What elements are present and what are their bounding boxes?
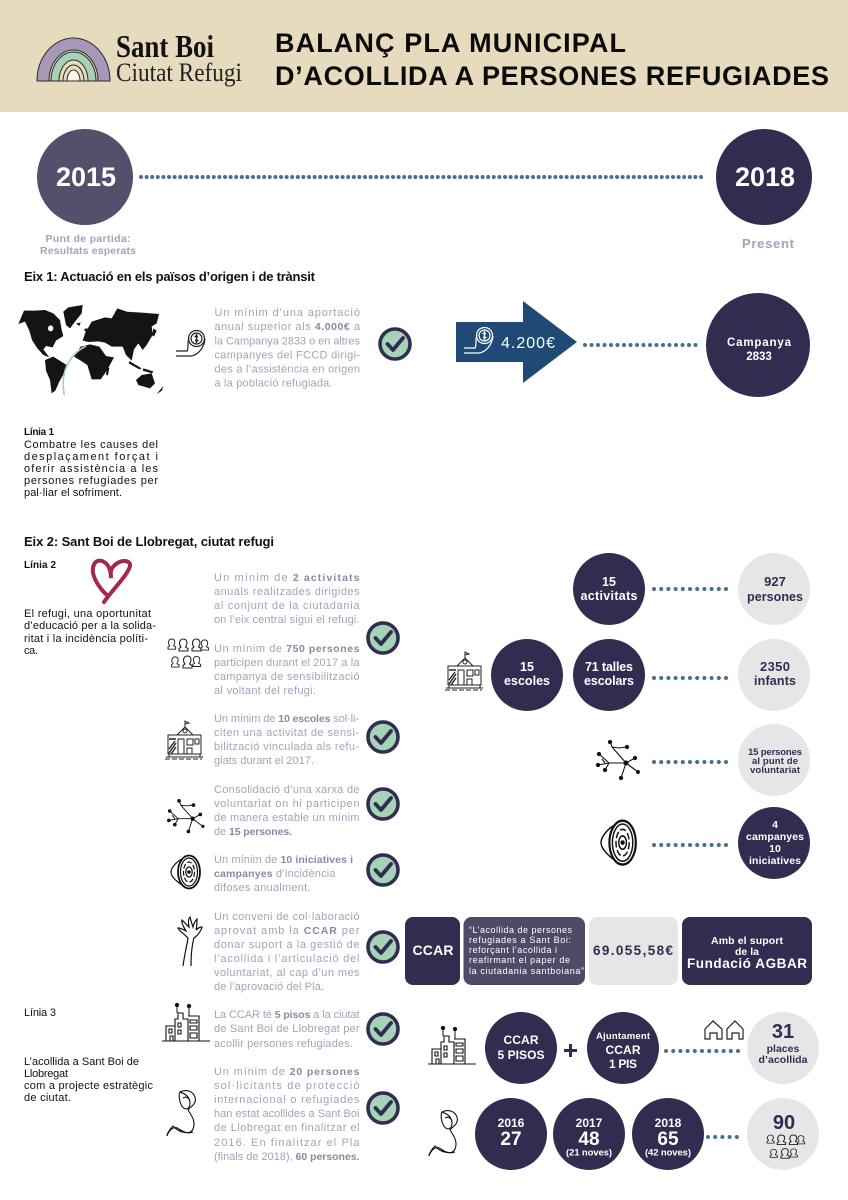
icon: building result (428, 1026, 476, 1064)
text block: contribution: la Campanya 2833 o en altres (214, 336, 360, 348)
box: CCAR: CCAR (412, 942, 454, 958)
icon: hand with coin (176, 330, 205, 356)
circle: 4 campanyes 10 iniciatives (738, 807, 810, 879)
text block: contribution: Un mínim d’una aportació (214, 307, 360, 319)
label: starting point: Punt de partida: (46, 233, 130, 245)
text block: 750 people: al voltant del refugi. (214, 685, 316, 697)
icon: raised hand (178, 917, 202, 966)
text block: volunteers: voluntariat on hi participen (214, 798, 360, 810)
text block: 20 people: de Llobregat en finalitzar el (214, 1122, 360, 1134)
text block: contribution: campanyes del FCCD dirigi- (214, 350, 360, 362)
text block: CCAR agreement: Un conveni de col·laboració (214, 911, 360, 923)
circle: 2018 (716, 129, 812, 225)
text block: schools: giats durant el 2017. (214, 755, 314, 767)
Línia 1 text (24, 427, 158, 499)
icon: heart (93, 561, 130, 602)
icon: people small (767, 1135, 805, 1158)
circle: 15 escoles: 15 (520, 660, 534, 674)
Línia 3 text (24, 1007, 154, 1104)
Línia 3 text: Línia 3 (24, 1007, 56, 1019)
check: schools (368, 722, 398, 752)
circle: 927 persones: persones (747, 590, 803, 604)
circle: 15 escoles: escoles (504, 674, 550, 688)
box: Fundació AGBAR: Amb el suport (711, 935, 784, 947)
timeline (37, 129, 812, 257)
box: Fundació AGBAR: de la (735, 946, 759, 958)
text block: initiatives: campanyes d’incidència (214, 868, 336, 880)
text block: CCAR agreement: aprovat amb la CCAR per (214, 925, 360, 937)
icon: figure result (429, 1111, 457, 1156)
text block: flats: La CCAR té 5 pisos a la ciutat (214, 1009, 360, 1021)
check: 20 people (368, 1093, 398, 1123)
title: BALANÇ PLA MUNICIPAL (275, 28, 626, 58)
circle: 2350 infants: 2350 (760, 659, 790, 674)
circle: Ajuntament CCAR 1 pis (587, 1012, 659, 1084)
circle: 31 places: places (767, 1043, 799, 1055)
text block: schools: citen una activitat de sensi- (214, 727, 359, 739)
icon: rainbow (37, 38, 110, 81)
title (275, 28, 829, 91)
Línia 2 text: Línia 2 (24, 560, 56, 571)
icon: hand white (464, 328, 493, 353)
circle: 2015 (37, 129, 133, 225)
text block: 20 people: Un mínim de 20 persones (214, 1066, 360, 1078)
box: project quote: “L’acollida de persones (469, 925, 572, 935)
circle: 2018 (632, 1098, 704, 1170)
dotted connector: flats (666, 1049, 739, 1053)
circle: 2015: 2015 (56, 162, 116, 192)
box: project quote: reforçant l’acollida i (469, 945, 557, 955)
arrow: 4.200 euros (456, 301, 577, 383)
text block: 750 people: campanya de sensibilització (214, 671, 360, 683)
icon: school result (445, 652, 483, 690)
icon: eye result (601, 821, 636, 865)
text block: schools: Un mínim de 10 escoles sol·li- (214, 713, 359, 725)
dotted connector: volunteers (654, 760, 727, 764)
circle: Ajuntament CCAR 1 pis: 1 PIS (609, 1057, 637, 1071)
Línia 3 text: Llobregat (24, 1068, 68, 1080)
circle: 2016 (475, 1098, 547, 1170)
box: amount (589, 917, 678, 985)
circle: 15 activitats: activitats (580, 589, 638, 603)
icon: people (168, 639, 209, 668)
circle: 2016: 2016 (498, 1116, 525, 1130)
circle: 2017: 2017 (576, 1116, 603, 1130)
text block: 750 people: Un mínim de 750 persones (214, 643, 360, 655)
Línia 3 text: com a projecte estratègic (24, 1080, 154, 1092)
text block: activities: Un mínim de 2 activitats (214, 572, 360, 584)
check: initiatives (368, 855, 398, 885)
circle: 2017 (553, 1098, 625, 1170)
check: flats (368, 1014, 398, 1044)
text block: contribution (214, 307, 361, 390)
label: starting point: Resultats esperats (40, 245, 136, 257)
box: project quote: refugiades a Sant Boi: (469, 935, 571, 945)
plus sign (564, 1044, 577, 1057)
circle: 71 tallers: 71 talles (585, 660, 633, 674)
Línia 1 text: pal·liar el sofriment. (24, 487, 122, 499)
text block: contribution: des a l’assistència en origen (214, 364, 360, 376)
circle: 927 persones: 927 (764, 574, 786, 589)
circle: 31 places: d’acollida (758, 1054, 808, 1066)
text block: CCAR agreement: de l’aprovació del Pla. (214, 981, 324, 993)
circle: 2350 infants (738, 639, 810, 711)
circle: 15 persones al punt de voluntariat: al punt de (752, 756, 798, 767)
text block: activities: on l’eix central sigui el refugi. (214, 614, 360, 626)
circle: 15 activitats: 15 (602, 575, 616, 589)
dotted connector: activities (654, 587, 727, 591)
circle: 4 campanyes 10 iniciatives: 10 (769, 843, 781, 855)
Línia 2 text: ritat i la incidència políti- (24, 633, 148, 645)
label: present: Present (742, 236, 795, 251)
box: CCAR (405, 917, 460, 985)
check: Eix 1 (380, 329, 410, 359)
text block: volunteers: Consolidació d’una xarxa de (214, 784, 360, 796)
circle: 71 tallers (573, 639, 645, 711)
icon: school (165, 721, 203, 759)
check: volunteers (368, 789, 398, 819)
circle: 2017: (21 noves) (566, 1148, 612, 1158)
circle: 31 places (747, 1012, 819, 1084)
heading: Eix 1: Eix 1: Actuació en els països d’origen i de trànsit (24, 269, 316, 284)
logo tagline: Ciutat Refugi (116, 58, 242, 87)
circle: 4 campanyes 10 iniciatives: campanyes (746, 831, 804, 843)
text block: 750 people (214, 643, 360, 697)
dotted connector: campaign (585, 343, 702, 347)
box: project quote: la ciutadania santboiana” (469, 966, 584, 976)
text block: 20 people: sol·licitants de protecció (214, 1080, 360, 1092)
text block: 750 people: participen durant el 2017 a la (214, 657, 360, 669)
circle: Ajuntament CCAR 1 pis: CCAR (606, 1043, 641, 1057)
circle: 2018: (42 noves) (645, 1148, 691, 1158)
circle: 2350 infants: infants (754, 674, 796, 688)
circle: 15 activitats (573, 553, 645, 625)
text block: 20 people: han estat acollides a Sant Boi (214, 1108, 360, 1120)
circle: CCAR 5 pisos: CCAR (504, 1033, 539, 1047)
Línia 2 text: ca. (24, 645, 38, 657)
text block: initiatives: Un mínim de 10 iniciatives i (214, 854, 353, 866)
Línia 1 text: desplaçament forçat i (24, 451, 158, 463)
arrow: journey (63, 346, 86, 395)
timeline dotted line (141, 175, 702, 179)
label: starting point (40, 233, 136, 257)
icon: building (162, 1003, 210, 1041)
text block: 20 people (214, 1066, 360, 1163)
text block: flats: de Sant Boi de Llobregat per (214, 1023, 360, 1035)
dotted connector: workshops (654, 676, 727, 680)
text block: activities: al conjunt de la ciutadania (214, 600, 360, 612)
text block: schools: bilització vinculada als refu- (214, 741, 359, 753)
Línia 1 text: persones refugiades per (24, 475, 158, 487)
Línia 1 text: oferir assistència a les (24, 463, 158, 475)
Línia 1 text: Combatre les causes del (24, 439, 158, 451)
Línia 3 text: de ciutat. (24, 1092, 71, 1104)
box: Fundació AGBAR (682, 917, 812, 985)
circle: 2018: 2018 (655, 1116, 682, 1130)
icon: figure (167, 1091, 195, 1136)
circle: 71 tallers: escolars (584, 674, 634, 688)
box: project quote: reafirmant el paper de (469, 955, 570, 965)
title: D’ACOLLIDA A PERSONES REFUGIADES (275, 61, 829, 91)
circle: 15 persones al punt de voluntariat: 15 persones (748, 747, 802, 758)
text block: 20 people: (finals de 2018), 60 persones. (214, 1151, 360, 1163)
text block: contribution: anual superior als 4.000€ a (214, 321, 361, 333)
circle: 31 places: 31 (772, 1021, 794, 1043)
circle: CCAR 5 pisos (485, 1012, 557, 1084)
icon: network (167, 799, 204, 833)
world map (18, 305, 163, 395)
check: CCAR agreement (368, 932, 398, 962)
circle: 2018: 2018 (735, 162, 795, 192)
box: Fundació AGBAR: Fundació AGBAR (687, 956, 807, 971)
text block: CCAR agreement: voluntariat, al cap d’un mes (214, 967, 360, 979)
circle: 90 people: 90 (773, 1112, 795, 1134)
circle: 4 campanyes 10 iniciatives: iniciatives (749, 855, 801, 867)
text block: 20 people: internacional o refugiades (214, 1094, 360, 1106)
text block: CCAR agreement: donar suport a la gestió de (214, 939, 360, 951)
circle: CCAR 5 pisos: 5 PISOS (498, 1048, 544, 1062)
circle: Ajuntament CCAR 1 pis: Ajuntament (596, 1031, 651, 1042)
circle: 2018: 65 (657, 1129, 679, 1150)
logo name: Sant Boi (116, 28, 214, 64)
icon: houses (705, 1021, 743, 1039)
circle: 4 campanyes 10 iniciatives: 4 (772, 819, 778, 831)
circle: 90 people (747, 1098, 819, 1170)
icon: network result (596, 740, 639, 780)
text block: initiatives: difoses anualment. (214, 882, 310, 894)
text block: activities (214, 572, 360, 626)
Línia 1 text: Línia 1 (24, 427, 54, 438)
text block: contribution: a la població refugiada. (214, 378, 332, 390)
circle: Campanya 2833 (706, 293, 810, 397)
text block: 20 people: 2016. En finalitzar el Pla (214, 1137, 360, 1149)
text block: volunteers: de manera estable un mínim (214, 812, 360, 824)
circle: 2016: 27 (500, 1129, 522, 1150)
amount: 4.200€ (501, 335, 555, 352)
box: project quote (464, 917, 585, 985)
circle: Campanya 2833: 2833 (746, 351, 772, 363)
text block: flats (214, 1009, 360, 1050)
Línia 2 text: d’educació per a la solida- (24, 620, 156, 632)
heading: Eix 2: Eix 2: Sant Boi de Llobregat, ciutat refugi (24, 534, 274, 549)
circle: Campanya 2833: Campanya (727, 337, 792, 349)
icon: eye (171, 856, 200, 888)
text block: activities: anuals realitzades dirigides (214, 586, 360, 598)
circle: 927 persones (738, 553, 810, 625)
header band (0, 0, 848, 112)
circle: 15 escoles (491, 639, 563, 711)
text block: flats: acollir persones refugiades. (214, 1038, 353, 1050)
circle: 15 persones al punt de voluntariat (738, 724, 810, 796)
text block: CCAR agreement (214, 911, 360, 993)
text block: volunteers (214, 784, 360, 838)
text block: schools (214, 713, 359, 767)
text block: CCAR agreement: l’acollida i l’articulació del (214, 953, 360, 965)
box: amount: 69.055,58€ (593, 943, 673, 958)
logo: Sant Boi Ciutat Refugi (37, 28, 242, 87)
Línia 2 text (24, 560, 156, 657)
circle: 2017: 48 (578, 1129, 600, 1150)
text block: volunteers: de 15 persones. (214, 826, 292, 838)
white gaps: bays and inland seas (48, 325, 105, 344)
check: activities (368, 623, 398, 653)
dotted connector: campaigns (654, 843, 727, 847)
dotted connector: total (708, 1135, 738, 1139)
text block: initiatives (214, 854, 353, 894)
circle: 15 persones al punt de voluntariat: voluntariat (750, 765, 801, 776)
Línia 3 text: L’acollida a Sant Boi de (24, 1056, 139, 1068)
Línia 2 text: El refugi, una oportunitat (24, 608, 151, 620)
